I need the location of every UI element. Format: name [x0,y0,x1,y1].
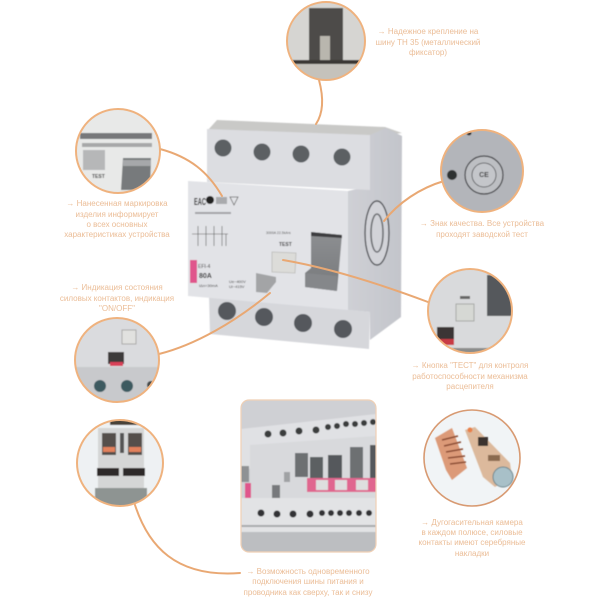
wiring diagram [192,226,228,246]
circle: quality mark [441,130,523,212]
line: bottom-left circle to image [135,505,240,574]
toggles [295,453,308,477]
circle: DIN rail latch [286,0,366,82]
device right side [348,128,402,340]
text: simultaneous connection: подключения шины питания и [252,577,364,586]
triangle mark [230,197,238,205]
circle: test button [427,269,513,356]
specs text: IΔn=30mA [199,283,218,288]
photo: multiple devices on rail [241,400,377,552]
voltage text: Ui~415V [229,284,245,289]
text: arc chamber and contacts: в каждом полюсе, силовые [421,528,523,537]
main device: residual current breaker [188,120,402,349]
certification marks [216,197,227,204]
rating text: 80A [199,273,212,280]
status indicator window [256,273,276,293]
terminal holes bottom [218,302,352,338]
text: on/off indication: силовых контактов, индикация [60,294,174,303]
breaking capacity text: 3000A 22.5kA²s [266,231,291,235]
text: test button: → Кнопка "ТЕСТ" для контроля [412,361,528,370]
pink label strip [307,478,376,492]
quality seal on side [365,201,389,265]
text: quality mark: проходят заводской тест [436,230,528,239]
test button [272,252,296,273]
terminal holes top [214,140,350,166]
circle: product marking: TEST [92,174,105,180]
pink rating strip [190,260,197,283]
left breaker parts [241,466,249,482]
circle: on/off indication [75,318,161,404]
text: product marking: → Нанесенная маркировка [66,199,168,208]
arc chamber [435,428,467,480]
connector lines [135,80,444,574]
line: quality circle to seal [384,181,444,221]
text: simultaneous connection: → Возможность одновременного [246,567,370,576]
TEST label: TEST [279,242,292,248]
text: test button: расцепителя [446,382,494,391]
grey toggle switch [305,232,342,291]
device middle front block [188,181,348,310]
text: arc chamber and contacts: контакты имеют серебряные [419,538,526,547]
circle: quality mark: CE [479,172,489,179]
text: on/off indication: "ON/OFF" [99,304,135,313]
marking brand EAC: EAC [194,197,206,208]
circle: product marking [75,108,163,194]
brand logo [206,196,214,204]
device top terminals [208,120,402,137]
rating line [195,212,231,214]
text: arc chamber and contacts: → Дугогасительная камера [421,518,523,527]
line: on/off circle to device [159,293,270,354]
top terminal row [264,419,376,438]
text: DIN rail latch: → Надежное крепление на [378,27,479,36]
text: simultaneous connection: проводника как сверху, так и снизу [244,588,372,597]
device upper front block [207,129,370,190]
circle: arc chamber and contacts [424,410,520,506]
bottom rule [241,525,376,527]
text: arc chamber and contacts: накладки [455,549,489,558]
text: product marking: о всех основных [86,220,148,229]
text: test button: работоспособности механизма [412,372,528,381]
seal inner mark [371,214,383,252]
toggle top edge [311,232,342,238]
contact assembly [465,427,512,487]
toggle handle [305,273,337,291]
text: product marking: изделия информирует [76,210,159,219]
text: DIN rail latch: фиксатор) [409,48,447,57]
text: quality mark: → Знак качества. Все устройства [420,219,545,228]
front of breakers [250,444,375,498]
device lower front block [209,295,370,349]
voltage text: Ue~400V [229,279,246,284]
model text: EFI-4 [198,264,210,270]
circle: terminals view [77,420,164,508]
text: on/off indication: → Индикация состояния [71,283,163,292]
line: top circle to device [316,80,322,124]
text: DIN rail latch: шину ТН 35 (металлический [376,38,480,47]
text: product marking: характеристиках устройства [64,230,170,239]
line: test circle to button [283,260,428,302]
bottom terminal row [258,510,372,518]
line: marking circle to device [160,149,222,196]
silver screw [493,467,513,487]
